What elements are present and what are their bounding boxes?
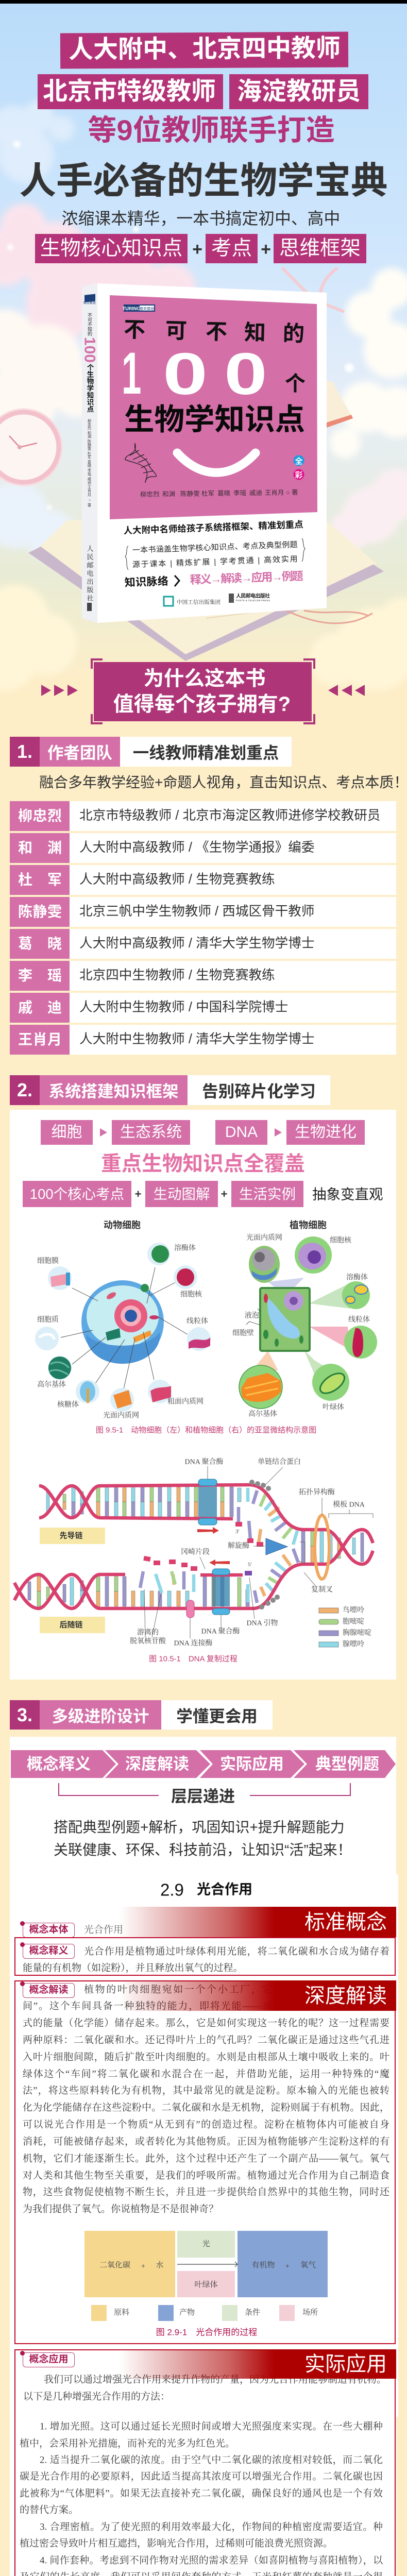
panel: deep interpretation: 间”。这个车间具备一种独特的能力，即将光能——或称太阳能——以另一种形 xyxy=(23,2001,389,2011)
feature tags: + xyxy=(261,240,271,259)
panel: deep interpretation: 可以说光合作用是一个物质“从无到有”的创造过程。淀粉在植物体内可能被自身 xyxy=(23,2120,389,2130)
template rungs xyxy=(301,1530,364,1562)
plant cell: 线粒体 xyxy=(348,1315,370,1324)
animal cell xyxy=(35,1220,211,1420)
section 2 header xyxy=(10,1075,330,1105)
tags: core points plus diagrams plus examples: 100个核心考点 xyxy=(30,1186,124,1202)
flow tags: cell to ecosystem, DNA to evolution xyxy=(41,1120,365,1145)
panel: deep interpretation: 化为化学能储存在这些淀粉中。二氧化碳和水是无机物，淀粉则属于有机物。因此， xyxy=(23,2102,389,2113)
section 1 header: 1. xyxy=(17,741,32,762)
front cover: 可 xyxy=(165,318,188,343)
open book behind xyxy=(28,515,384,661)
front cover: 李瑶 xyxy=(233,489,246,497)
banner: deep interpretation xyxy=(120,1980,396,2011)
front cover xyxy=(97,283,327,623)
chevron flow: four stages: 实际应用 xyxy=(220,1755,284,1773)
front cover: TURING xyxy=(123,306,140,311)
labels: 模板 DNA xyxy=(333,1500,365,1509)
front cover: 王肖月 ○ 著 xyxy=(265,489,298,497)
panel: deep interpretation: 入叶片细胞间隙，随后扩散至叶肉细胞的。水则是由根部从土壤中吸收上来的。叶 xyxy=(23,2052,389,2063)
labels: DNA 聚合酶 xyxy=(184,1458,224,1466)
front cover: 杜军 xyxy=(201,489,214,497)
badge: definition xyxy=(23,1944,75,1959)
section 3 description: 搭配典型例题+解析，巩固知识+提升解题能力 xyxy=(54,1819,345,1835)
legend xyxy=(319,1606,371,1649)
front cover: 人民邮电出版社 xyxy=(236,592,270,599)
animal cell: 动物细胞 xyxy=(104,1220,141,1230)
panel: section 3 white card xyxy=(10,1737,396,2576)
chart: photosynthesis flow xyxy=(84,2231,328,2337)
panel: practical application: 的替代方案。 xyxy=(20,2505,78,2515)
legend: 条件 xyxy=(245,2308,260,2317)
tags: core points plus diagrams plus examples: 生动图解 xyxy=(154,1186,210,1202)
caption: 图 10.5-1 DNA 复制过程 xyxy=(149,1654,238,1663)
plant cell xyxy=(232,1219,377,1418)
arrows: left triple xyxy=(41,685,78,696)
badge: concept subject: 概念本体 xyxy=(29,1924,68,1935)
legend: 胞嘧啶 xyxy=(343,1617,364,1626)
front cover: 0 xyxy=(163,341,208,407)
panel: deep interpretation: 式的能量（化学能）储存起来。那么，它是如何实现这一转化的呢？这一过程需要 xyxy=(23,2018,389,2029)
main title: 人手必备的生物学宝典 xyxy=(19,160,388,201)
section 1 intro: 融合多年教学经验+命题人视角，直击知识点、考点本质！ xyxy=(39,774,407,790)
feature tags: 思维框架 xyxy=(279,237,361,260)
front cover: 生物学知识点 xyxy=(124,403,305,436)
banner: standard concept xyxy=(120,1907,396,1937)
panel: deep interpretation: 两种原料：二氧化碳和水。还记得叶片上的气孔吗？二氧化碳正是通过这些气孔进 xyxy=(23,2035,389,2045)
author table: 北京四中生物教师 / 生物竞赛教练 xyxy=(79,968,275,982)
panel: practical application xyxy=(14,2349,396,2576)
plant cell: 高尔基体 xyxy=(248,1410,277,1418)
author table: 人大附中高级教师 / 《生物学通报》编委 xyxy=(79,840,314,855)
full colour badges: 全 xyxy=(295,456,303,466)
tags: core points plus diagrams plus examples: + xyxy=(135,1188,141,1200)
hero background: sky, clouds, clock and open books xyxy=(0,0,407,690)
labels: 复制叉 xyxy=(311,1586,333,1594)
banner: special-grade teacher: 北京市特级教师 xyxy=(43,78,216,105)
panel: deep interpretation: 物，这些食物促使植物不断生长，并且进一步提供给自然界中的其他生物，同时还 xyxy=(23,2187,389,2198)
panel: concept definition: 能量的有机物（如淀粉），并且释放出氧气的过程。 xyxy=(23,1963,243,1973)
plant cell: 叶绿体 xyxy=(323,1402,344,1412)
badge: application xyxy=(23,2352,75,2367)
front cover: 不 xyxy=(123,317,146,342)
panel: practical application: 植过密会导致叶片相互遮挡，影响光合作用，过稀则可能浪费光照资源。 xyxy=(20,2538,333,2549)
labels: 脱氧核苷酸 xyxy=(130,1636,166,1646)
chart: photosynthesis flow: 二氧化碳 xyxy=(99,2261,130,2269)
feature tags: 考点 xyxy=(211,237,252,260)
animal cell: 光面内质网 xyxy=(103,1411,139,1420)
badge: interpretation: 概念解读 xyxy=(29,1985,68,1995)
panel: practical application: 4. 间作套种。考虑到不同作物对光照的需求差异（如喜阴植物与喜阳植物），以 xyxy=(40,2555,383,2566)
spine: 个生物学知识点 xyxy=(86,364,94,413)
author table: 杜军 xyxy=(18,872,62,888)
panel: deep interpretation: 绿体这个“车间”将二氧化碳和水混合在一起，并借助光能，运用一种特殊的“魔 xyxy=(23,2069,389,2079)
animal cell: 线粒体 xyxy=(186,1317,208,1325)
panel: practical application: 3. 合理密植。为了使光照的利用效率最大化，作物间的种植密度需要适宜。种 xyxy=(40,2521,383,2533)
chart: photosynthesis flow: 光 xyxy=(202,2240,210,2248)
spine: 图灵教育 xyxy=(83,301,96,305)
banner: practical application xyxy=(120,2349,396,2379)
feature tags: + xyxy=(192,240,202,259)
fork rungs xyxy=(248,1488,298,1603)
direction arrows xyxy=(197,1527,219,1534)
front cover: 人大附中名师给孩子系统搭框架、精准划重点 xyxy=(123,519,303,536)
proteins xyxy=(186,1479,329,1618)
small book with red edge xyxy=(319,381,353,428)
full colour badges xyxy=(294,455,304,480)
section 1 header: 作者团队 xyxy=(47,743,112,762)
panel: practical application: 植中，会采用补光措施，而补充的光多为红色光。 xyxy=(20,2438,235,2449)
legend: 场所 xyxy=(302,2308,318,2317)
labels: 冈崎片段 xyxy=(181,1548,210,1556)
animal cell: 细胞核 xyxy=(180,1290,202,1298)
panel: deep interpretation: 消耗，可能被储存起来，或者转化为其他物质。正因为植物能够产生淀粉这样的有 xyxy=(23,2136,389,2147)
front cover: 葛晓 xyxy=(217,490,231,497)
leading strand rungs xyxy=(46,1487,241,1517)
backbones xyxy=(14,1485,373,1608)
chart: animal and plant cell diagrams xyxy=(35,1219,377,1434)
section heading: why this book: 为什么这本书 xyxy=(143,667,266,690)
tags: core points plus diagrams plus examples: 生活实例 xyxy=(239,1186,296,1202)
plant cell: 溶酶体 xyxy=(346,1273,368,1282)
panel: practical application: 2. 适当提升二氧化碳的浓度。由于空气中二氧化碳的浓度相对较低，而二氧化 xyxy=(40,2454,383,2466)
front cover: 和渊 xyxy=(162,490,175,498)
sample page title: 2.9 xyxy=(160,1880,184,1899)
feature tags: 生物核心知识点 xyxy=(40,237,182,260)
free nucleotides xyxy=(140,1507,261,1602)
labels: 解旋酶 xyxy=(228,1541,249,1550)
headline: nine teachers: 等9位教师联手打造 xyxy=(88,114,335,146)
plant cell: 液泡 xyxy=(245,1311,259,1320)
sample page title: 光合作用 xyxy=(197,1882,252,1897)
panel: section 2 white card xyxy=(10,1110,396,1680)
subtitle: 浓缩课本精华，一本书搞定初中、高中 xyxy=(62,209,340,228)
banner: standard concept: 标准概念 xyxy=(304,1910,387,1933)
front cover: 柳忠烈 xyxy=(140,491,160,498)
chart: photosynthesis flow: 有机物 xyxy=(251,2260,275,2269)
author table: 陈静雯 xyxy=(18,904,62,920)
author table: 王肖月 xyxy=(18,1031,62,1047)
book cover image with real text xyxy=(81,283,327,623)
caption: 图 2.9-1 光合作用的过程 xyxy=(156,2328,257,2337)
flow tags: cell to ecosystem, DNA to evolution: DNA xyxy=(225,1124,258,1141)
animal cell: 细胞膜 xyxy=(37,1257,59,1265)
front cover: POSTS & TELECOM PRESS xyxy=(236,599,270,602)
front cover: 0 xyxy=(224,341,267,407)
section 2 header: 告别碎片化学习 xyxy=(202,1082,316,1100)
section heading: why this book xyxy=(91,658,315,724)
badge: concept subject xyxy=(23,1923,75,1938)
legend: 产物 xyxy=(179,2308,195,2317)
feature tags xyxy=(35,234,366,263)
panel: practical application: 此被称为“气体肥料”。如果无法直接补充二氧化碳，确保良好的通风也是一个有效 xyxy=(20,2488,383,2499)
front cover: 陈静雯 xyxy=(180,489,200,498)
plant cell: 光面内质网 xyxy=(246,1233,282,1242)
legend: 胸腺嘧啶 xyxy=(343,1628,371,1637)
spine: 不可不知的 xyxy=(87,313,92,336)
author table: 人大附中生物教师 / 中国科学院博士 xyxy=(79,1000,288,1014)
panel: deep interpretation: 法”，将这些原料转化为有机物，其中最常见的就是淀粉。原本输入的光能也被转 xyxy=(23,2086,389,2096)
panel: concept definition xyxy=(14,1937,396,1976)
DNA icon xyxy=(125,443,156,483)
front cover: 中国工信出版集团 xyxy=(177,599,221,605)
legend: 原料 xyxy=(114,2308,129,2317)
author table: 人大附中高级教师 / 生物竞赛教练 xyxy=(79,872,275,887)
section 3 header: 多级进阶设计 xyxy=(52,1706,149,1725)
chevron flow: four stages: 深度解读 xyxy=(125,1755,189,1773)
labels xyxy=(130,1457,365,1648)
front cover: 知 xyxy=(244,320,266,345)
chevron flow: four stages: 概念释义 xyxy=(27,1755,91,1773)
plant cell: 植物细胞 xyxy=(290,1219,327,1230)
heading: full coverage: 重点生物知识点全覆盖 xyxy=(101,1153,305,1175)
panel: concept name row: 光合作用 xyxy=(84,1925,123,1935)
front cover: 个 xyxy=(285,372,306,395)
section 1 header xyxy=(10,737,292,767)
section 3 description: 关联健康、环保、科技前沿，让知识“活”起来！ xyxy=(54,1842,352,1858)
animal cell: 高尔基体 xyxy=(37,1380,66,1389)
panel: deep interpretation: 为我们提供了氧气。你说植物是不是很神奇？ xyxy=(23,2204,218,2214)
lead and lag strand labels: 先导链 xyxy=(59,1531,83,1540)
badge: interpretation xyxy=(23,1983,75,1998)
full colour badges: 彩 xyxy=(295,471,303,480)
clock xyxy=(0,409,62,485)
labels: 拓扑异构酶 xyxy=(299,1488,335,1496)
chart: photosynthesis flow: 氧气 xyxy=(300,2261,316,2269)
section 3 description xyxy=(54,1819,352,1858)
legend xyxy=(91,2305,318,2321)
spine xyxy=(81,283,98,623)
front cover: 的 xyxy=(282,321,305,346)
banner: Haidian researcher xyxy=(229,74,368,109)
lead and lag strand labels xyxy=(40,1528,105,1633)
author table: 葛晓 xyxy=(18,936,62,952)
chart: photosynthesis flow: 水 xyxy=(156,2261,164,2269)
section 3 header xyxy=(10,1700,273,1730)
plant cell: 细胞壁 xyxy=(232,1329,254,1337)
spine: 柳忠烈 和渊 陈静雯 杜军 葛晓 李瑶 戚迪 王肖月 ○ 著 xyxy=(88,418,92,507)
labels: 3′ xyxy=(235,1529,240,1535)
flow tags: cell to ecosystem, DNA to evolution: 生物进化 xyxy=(295,1124,357,1141)
animal cell: 粗面内质网 xyxy=(167,1397,204,1405)
flow tags: cell to ecosystem, DNA to evolution: 生态系统 xyxy=(120,1124,182,1141)
sample page title xyxy=(160,1880,252,1899)
bracket with progressive label xyxy=(58,1783,351,1805)
banner: Haidian researcher: 海淀教研员 xyxy=(237,78,361,105)
animal cell: 细胞质 xyxy=(37,1316,59,1324)
labels: 5′ xyxy=(248,1562,252,1568)
front cover: 1 xyxy=(122,341,141,406)
panel: practical application: 我们可以通过增强光合作用来提升作物的产量，因为光合作用能够制造有机物。 xyxy=(44,2374,386,2385)
spine: 人民邮电出版社 xyxy=(86,545,94,603)
spine: 100 xyxy=(81,337,98,363)
badge: application: 概念应用 xyxy=(29,2354,68,2365)
panel: concept name row xyxy=(20,1921,123,1937)
arrows: right triple xyxy=(328,685,365,696)
lagging strand rungs xyxy=(28,1577,249,1606)
front cover: 知识脉络 xyxy=(124,575,168,589)
front cover: 源于课本 | 精炼扩展 | 学考贯通 | 高效实用 xyxy=(132,555,298,569)
panel: deep interpretation xyxy=(14,1980,396,2344)
author table: 北京市特级教师 / 北京市海淀区教师进修学校教研员 xyxy=(79,808,380,823)
section 2 header: 2. xyxy=(17,1079,32,1100)
section 2 header: 系统搭建知识框架 xyxy=(48,1082,178,1100)
banner: deep interpretation: 深度解读 xyxy=(304,1985,387,2007)
chevron flow: four stages: 典型例题 xyxy=(315,1755,379,1773)
author table: 李瑶 xyxy=(18,968,62,984)
tags: core points plus diagrams plus examples xyxy=(23,1181,383,1207)
author table xyxy=(10,801,396,1055)
front cover: 一本书涵盖生物学核心知识点、考点及典型例题 xyxy=(132,540,298,555)
front cover: 戚迪 xyxy=(249,489,262,497)
chart: photosynthesis flow: + xyxy=(141,2262,145,2270)
tags: core points plus diagrams plus examples: + xyxy=(221,1188,227,1200)
author table: 北京三帆中学生物教师 / 西城区骨干教师 xyxy=(79,904,314,919)
chart: DNA replication diagram xyxy=(13,1457,375,1663)
panel: concept definition: 光合作用是植物通过叶绿体利用光能，将二氧化碳和水合成为储存着 xyxy=(84,1946,389,1957)
labels: DNA 聚合酶 xyxy=(201,1627,240,1635)
smile xyxy=(177,453,256,472)
author table: 戚迪 xyxy=(18,999,62,1015)
flow tags: cell to ecosystem, DNA to evolution: 细胞 xyxy=(52,1124,82,1141)
labels: DNA 连接酶 xyxy=(174,1638,213,1648)
panel: extended white sample page xyxy=(10,1874,398,2417)
author table: 人大附中高级教师 / 清华大学生物学博士 xyxy=(79,936,314,951)
tags: core points plus diagrams plus examples: 抽象变直观 xyxy=(312,1186,383,1202)
front cover: 图灵原创 xyxy=(139,306,155,311)
panel: practical application: 1. 增加光照。这可以通过延长光照时间或增大光照强度来实现。在一些大棚种 xyxy=(40,2421,383,2432)
panel: practical application: 碳是光合作用的必要原料，因此适当提高其浓度可以增强光合作用。二氧化碳也因 xyxy=(20,2471,383,2482)
animal cell: 核糖体 xyxy=(57,1400,79,1409)
chart: photosynthesis flow: + xyxy=(285,2262,290,2270)
bracket with progressive label: 层层递进 xyxy=(171,1788,235,1805)
front cover: 释义→解读→应用→例题 xyxy=(190,569,303,586)
section 1 header: 一线教师精准划重点 xyxy=(133,743,279,762)
animal cell: 溶酶体 xyxy=(174,1244,196,1252)
labels: 游离的 xyxy=(137,1628,159,1636)
plant cell: 细胞核 xyxy=(330,1235,352,1245)
author table: 柳忠烈 xyxy=(18,808,62,824)
section 3 header: 3. xyxy=(17,1704,32,1725)
panel: practical application: 以下是几种增强光合作用的方法： xyxy=(23,2392,170,2402)
legend: 腺嘌呤 xyxy=(343,1640,364,1649)
pointer lines xyxy=(144,1466,373,1638)
section 3 header: 学懂更会用 xyxy=(176,1706,258,1725)
lead and lag strand labels: 后随链 xyxy=(59,1620,83,1629)
banner: teachers line 1: 人大附中、北京四中教师 xyxy=(69,35,341,63)
badge: definition: 概念释义 xyxy=(29,1945,68,1956)
chevron flow: four stages xyxy=(11,1750,396,1778)
chart: photosynthesis flow: 叶绿体 xyxy=(194,2280,218,2289)
section heading: why this book: 值得每个孩子拥有? xyxy=(113,693,291,716)
caption: 图 9.5-1 动物细胞（左）和植物细胞（右）的亚显微结构示意图 xyxy=(96,1425,316,1434)
ribbon xyxy=(282,268,344,312)
panel: deep interpretation: 机物，它们才能逐渐生长。此外，这个过程中还产生了一个副产品——氧气。氧气 xyxy=(23,2154,389,2164)
labels: DNA 引物 xyxy=(246,1619,278,1627)
front cover: 不 xyxy=(205,319,228,344)
labels: 单链结合蛋白 xyxy=(258,1457,301,1466)
legend: 鸟嘌呤 xyxy=(343,1606,364,1615)
panel: deep interpretation: 植物的叶肉细胞宛如一个个小工厂，它们内部的叶绿体就是“车 xyxy=(84,1985,389,1995)
panel: deep interpretation: 对人类和其他生物至关重要，是我们的呼吸所需。植物通过光合作用为自己制造食 xyxy=(23,2170,389,2181)
author table: 和渊 xyxy=(18,840,62,856)
banner: practical application: 实际应用 xyxy=(304,2352,387,2375)
author table: 人大附中生物教师 / 清华大学生物学博士 xyxy=(79,1032,314,1046)
